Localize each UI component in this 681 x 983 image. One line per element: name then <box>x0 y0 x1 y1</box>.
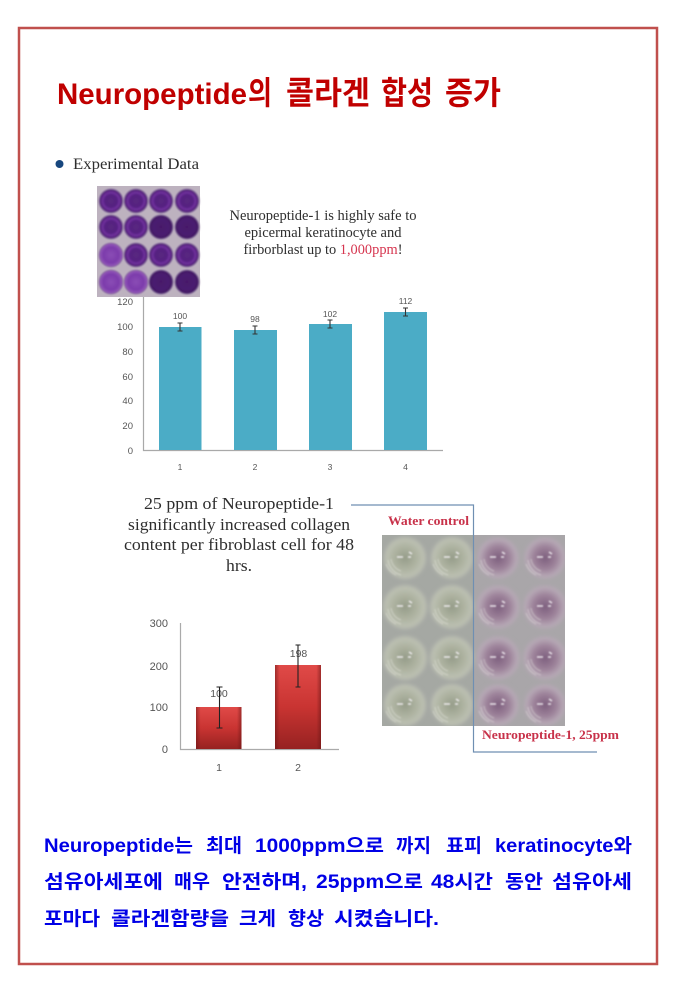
body text: 안전하며, <box>222 871 307 893</box>
label: water control: Water control <box>388 514 470 528</box>
y axis labels: 300 <box>150 618 168 630</box>
label: neuropeptide 25ppm: Neuropeptide-1, 25ppm <box>482 728 620 742</box>
body text: 최대 <box>206 835 242 857</box>
y axis labels: 100 <box>150 702 168 714</box>
text block: collagen statement: content per fibroblast cell for 48 <box>124 535 354 554</box>
title <box>57 75 501 111</box>
error bars <box>178 308 408 334</box>
y axis labels: 0 <box>162 744 168 756</box>
text block: safety statement: epicermal keratinocyte and <box>244 225 402 241</box>
y axis labels <box>150 618 168 756</box>
value labels: 198 <box>290 648 307 660</box>
text block: collagen statement: 25 ppm of Neuropeptide-1 <box>144 494 334 513</box>
value and category labels: 112 <box>399 296 413 306</box>
value labels <box>210 648 307 700</box>
y axis labels: 40 <box>122 396 133 407</box>
error bars <box>216 645 300 728</box>
value and category labels <box>173 296 413 472</box>
body text: 동안 <box>505 871 543 893</box>
bar chart: collagen <box>150 618 339 774</box>
text block: safety statement <box>230 208 416 258</box>
category labels: 1 <box>216 762 222 774</box>
title: 콜라겐 <box>286 75 370 111</box>
body text: Neuropeptide는 <box>44 835 193 857</box>
body text: 까지 <box>396 835 431 857</box>
y axis labels: 20 <box>122 421 133 432</box>
body text: 표피 <box>446 835 482 857</box>
title: 증가 <box>445 75 501 111</box>
body text: 매우 <box>174 871 210 893</box>
value labels: 100 <box>210 688 228 700</box>
title: 의 <box>248 75 272 111</box>
y axis labels: 60 <box>122 372 133 383</box>
y axis labels: 200 <box>150 661 168 673</box>
photo: purple well plate <box>97 186 200 297</box>
body text: 48시간 <box>431 871 493 893</box>
y axis labels: 0 <box>128 446 133 457</box>
body text: 섬유아세 <box>552 871 632 893</box>
text block: collagen statement: significantly increased collagen <box>128 515 351 534</box>
text block: collagen statement: hrs. <box>226 556 252 575</box>
bars <box>159 312 427 450</box>
body text <box>44 835 632 930</box>
body text: 섬유아세포에 <box>44 871 163 893</box>
bar chart: safety <box>117 296 443 472</box>
body text: keratinocyte와 <box>495 835 632 857</box>
value and category labels: 4 <box>403 462 408 472</box>
title: Neuropeptide <box>57 78 247 111</box>
value and category labels: 2 <box>253 462 258 472</box>
category labels: 2 <box>295 762 301 774</box>
y axis labels: 120 <box>117 297 133 308</box>
bracket line <box>351 505 597 752</box>
body text: 25ppm으로 <box>316 872 423 893</box>
value and category labels: 98 <box>250 314 260 324</box>
value and category labels: 3 <box>328 462 333 472</box>
text block: safety statement: firborblast up to 1,000ppm! <box>244 242 403 258</box>
y axis labels <box>117 297 133 457</box>
body text: 콜라겐함량을 <box>111 908 229 930</box>
body text: 크게 <box>239 908 276 930</box>
value and category labels: 100 <box>173 311 187 321</box>
value and category labels: 102 <box>323 309 337 319</box>
title: 합성 <box>381 75 433 111</box>
well highlights <box>386 552 552 722</box>
body text: 포마다 <box>44 908 101 930</box>
body text: 1000ppm으로 <box>255 836 384 857</box>
bars <box>196 665 321 749</box>
section heading: experimental data: Experimental Data <box>73 156 199 173</box>
category labels <box>216 762 301 774</box>
photo: collagen well plate <box>382 535 568 727</box>
value and category labels: 1 <box>178 462 183 472</box>
text block: collagen statement <box>124 494 354 575</box>
y axis labels: 100 <box>117 322 133 333</box>
body text: 시켰습니다. <box>334 908 439 930</box>
y axis labels: 80 <box>122 347 133 358</box>
text block: safety statement: Neuropeptide-1 is highly safe to <box>230 208 416 224</box>
body text: 향상 <box>288 908 324 930</box>
